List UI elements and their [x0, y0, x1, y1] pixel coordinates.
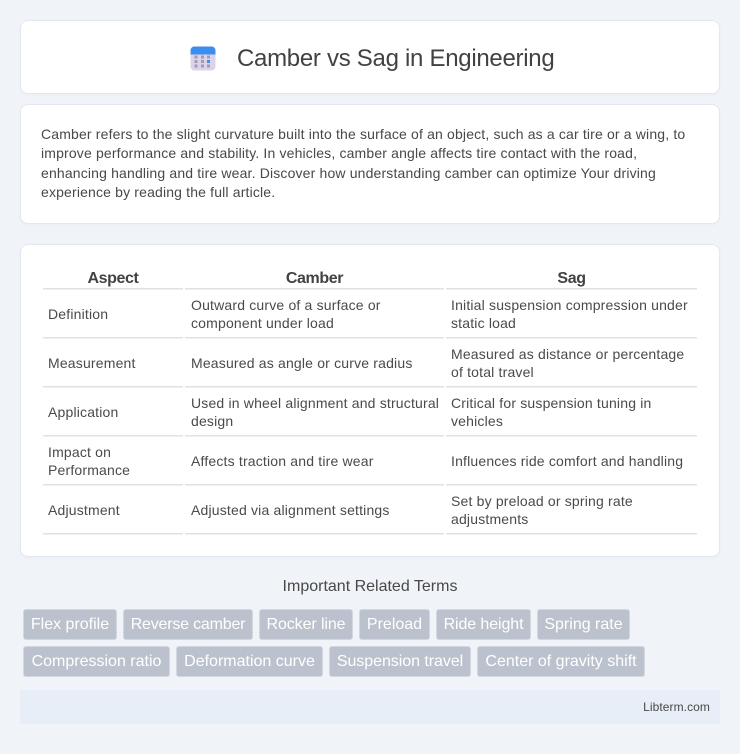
related term tags	[23, 609, 645, 677]
comparison table: design	[191, 413, 233, 429]
comparison table: component under load	[191, 315, 334, 331]
comparison table: Measurement	[48, 355, 136, 371]
footer bar	[20, 690, 720, 724]
comparison table: static load	[451, 315, 516, 331]
comparison table: Influences ride comfort and handling	[451, 453, 683, 469]
comparison table: Impact on	[48, 444, 111, 460]
related term tags: Ride height	[444, 616, 523, 633]
related term tags: Compression ratio	[32, 653, 161, 670]
header card	[20, 20, 720, 94]
intro text	[41, 126, 685, 200]
related term tags: Rocker line	[267, 616, 345, 633]
comparison table: Set by preload or spring rate	[451, 493, 633, 509]
comparison table: Sag	[557, 270, 586, 287]
comparison table: Camber	[286, 270, 343, 287]
intro text: improve performance and stability. In vehicles, camber angle affects tire contact with the road,	[41, 145, 637, 161]
comparison table: Outward curve of a surface or	[191, 297, 381, 313]
intro card	[20, 104, 720, 224]
comparison table: Measured as angle or curve radius	[191, 355, 412, 371]
icon: calendar	[190, 46, 216, 70]
comparison table: Aspect	[88, 270, 138, 287]
comparison table: Measured as distance or percentage	[451, 346, 684, 362]
footer credit: Libterm.com	[643, 700, 710, 714]
related term tags: Deformation curve	[184, 653, 315, 670]
comparison table	[43, 270, 697, 535]
comparison table: Critical for suspension tuning in	[451, 395, 651, 411]
related terms heading: Important Related Terms	[283, 578, 457, 595]
comparison table: Adjusted via alignment settings	[191, 502, 390, 518]
comparison table: Definition	[48, 306, 108, 322]
comparison table: of total travel	[451, 364, 534, 380]
comparison table: Affects traction and tire wear	[191, 453, 374, 469]
comparison table card	[20, 244, 720, 557]
related term tags: Preload	[367, 616, 422, 633]
comparison table: Used in wheel alignment and structural	[191, 395, 439, 411]
title: Camber vs Sag in Engineering	[237, 45, 554, 72]
related term tags: Spring rate	[544, 616, 623, 633]
related term tags: Flex profile	[31, 616, 109, 633]
comparison table: adjustments	[451, 511, 528, 527]
comparison table: Performance	[48, 462, 130, 478]
related term tags: Reverse camber	[131, 616, 245, 633]
related term tags: Center of gravity shift	[485, 653, 637, 670]
comparison table: vehicles	[451, 413, 503, 429]
related term tags: Suspension travel	[337, 653, 463, 670]
comparison table: Application	[48, 404, 118, 420]
comparison table: Adjustment	[48, 502, 120, 518]
intro text: Camber refers to the slight curvature built into the surface of an object, such as a car tire or a wing, to	[41, 126, 685, 142]
intro text: enhancing handling and tire wear. Discover how understanding camber can optimize Your driving	[41, 165, 656, 181]
comparison table: Initial suspension compression under	[451, 297, 688, 313]
intro text: experience by reading the full article.	[41, 184, 275, 200]
